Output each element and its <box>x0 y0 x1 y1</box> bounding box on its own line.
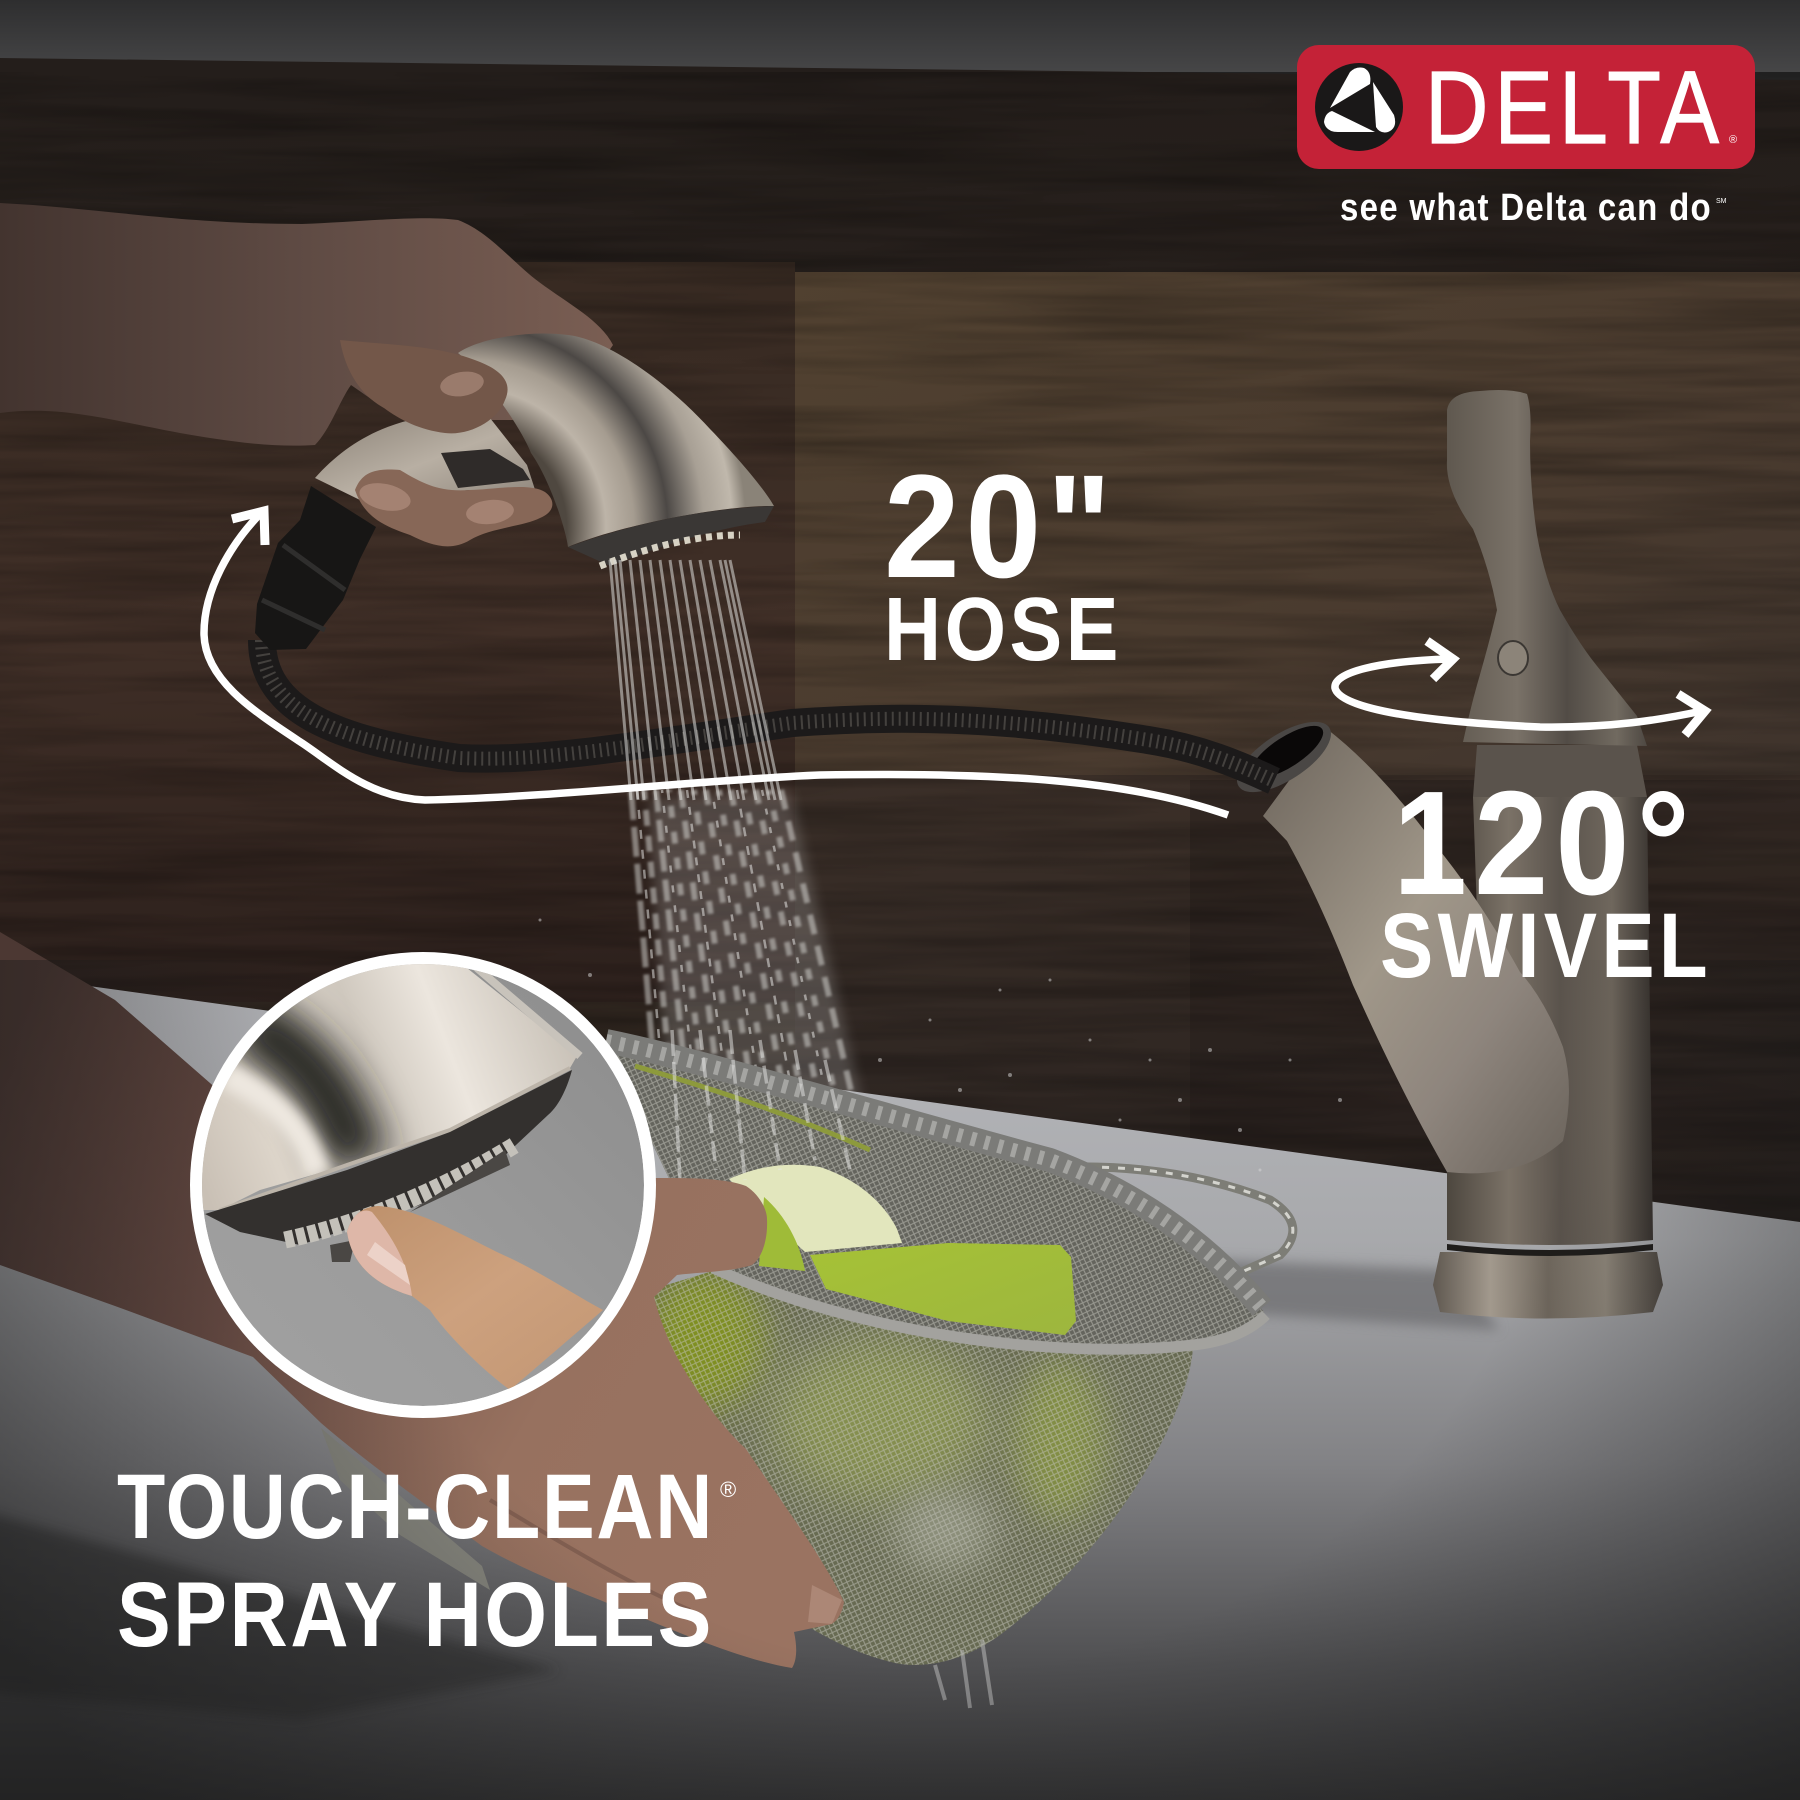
label: touch-clean spray holes: TOUCH-CLEAN <box>117 1456 714 1558</box>
left bowl fragment <box>321 1428 490 1590</box>
logo wordmark: DELTA <box>1425 50 1725 165</box>
inset finger <box>347 1206 603 1390</box>
handle temperature indicator <box>1498 641 1528 675</box>
faucet spout <box>1263 729 1569 1173</box>
strainer handle <box>1070 1167 1293 1271</box>
swivel arrow <box>1335 641 1705 735</box>
label: 20 inch hose: 20" <box>884 445 1117 609</box>
inset dome <box>202 964 582 1210</box>
spout opening <box>1226 708 1342 806</box>
hose reach arrow <box>204 511 1228 815</box>
label: 20 inch hose <box>884 445 1122 680</box>
mesh strainer with apples <box>321 1030 1293 1708</box>
inset rubber nozzles <box>285 1145 515 1240</box>
strainer bowl exterior <box>654 1272 1193 1665</box>
spray face <box>568 506 774 566</box>
lower fingers <box>355 470 552 546</box>
inset dark seal band <box>205 1070 572 1245</box>
logo badge <box>1297 45 1755 169</box>
pale apple slice <box>729 1165 902 1252</box>
faucet neck <box>1473 745 1647 797</box>
Delta logo <box>1297 45 1755 229</box>
spray neck <box>315 418 540 505</box>
thumb nail <box>438 368 486 400</box>
thumb <box>340 340 508 433</box>
strainer interior <box>606 1041 1264 1354</box>
faucet handle <box>1447 390 1647 746</box>
quick-connect fitting <box>255 486 376 650</box>
lower broken droplets <box>631 790 852 1140</box>
drip under strainer <box>935 1640 992 1708</box>
hammered wet rim <box>606 1041 1262 1308</box>
green reflection under rim <box>635 1066 870 1150</box>
trigger button <box>441 449 530 488</box>
label: 120 degree swivel: 120° <box>1393 761 1697 926</box>
label: 120 degree swivel <box>1380 761 1712 997</box>
upper continuous streams <box>610 560 781 800</box>
upper hand holding spray head <box>0 203 613 446</box>
metal dome <box>458 334 774 547</box>
spray head <box>255 334 774 650</box>
label: touch-clean spray holes: ® <box>720 1477 736 1502</box>
label: 20 inch hose: HOSE <box>884 580 1122 680</box>
faucet column <box>1447 797 1653 1245</box>
label: touch-clean spray holes <box>117 1456 736 1666</box>
label: 120 degree swivel: SWIVEL <box>1380 895 1712 997</box>
secondary fine droplets <box>637 790 828 1140</box>
Delta logo: SM <box>1716 198 1727 205</box>
Delta logo: ® <box>1729 134 1737 146</box>
vignette overlay <box>0 960 1800 1800</box>
faucet base ring <box>1433 1252 1663 1318</box>
inset: touch-clean close-up <box>180 940 656 1418</box>
logo tagline: see what Delta can do <box>1340 187 1712 229</box>
lower hand holding strainer <box>0 932 844 1668</box>
green apple wedge <box>810 1243 1076 1335</box>
small apple piece <box>759 1197 805 1271</box>
water landing on strainer <box>672 1030 850 1180</box>
water spray <box>610 560 861 1150</box>
front rim <box>713 1268 1266 1349</box>
water wash <box>650 790 861 1150</box>
logo emblem <box>1315 63 1403 151</box>
faucet: handle, column, spout and base <box>1226 390 1663 1318</box>
water droplets on wood <box>538 918 1372 1172</box>
finger nails <box>357 479 515 526</box>
hose <box>262 640 1274 781</box>
label: touch-clean spray holes: SPRAY HOLES <box>117 1564 714 1666</box>
